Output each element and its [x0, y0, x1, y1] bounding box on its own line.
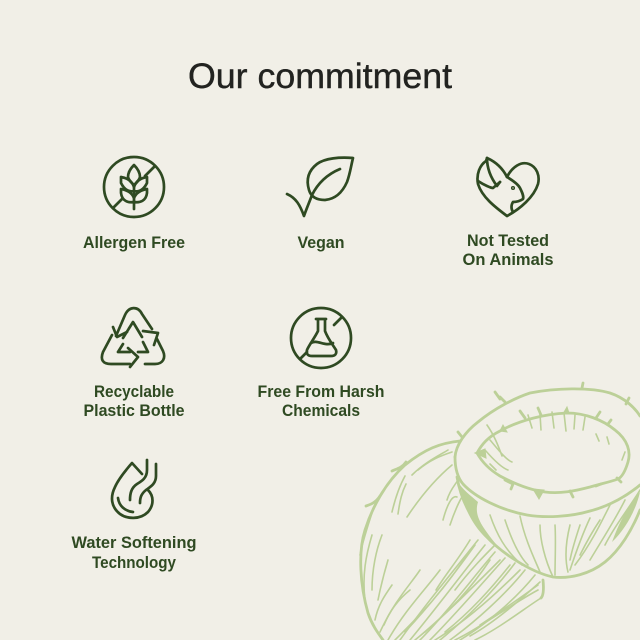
item: not tested on animals: [462, 158, 554, 269]
item: vegan: [287, 158, 353, 252]
illustration: coconut: [360, 383, 640, 640]
icon: crossed flask: [291, 308, 351, 368]
item: water softening technology: [72, 460, 196, 572]
label: Free From Harsh: [258, 383, 384, 401]
label: Not Tested: [467, 232, 549, 250]
shell shading left and right: [458, 482, 500, 549]
front coconut shell: [455, 383, 640, 577]
icon: leaf check: [287, 158, 353, 216]
item: free from harsh chemicals: [258, 308, 384, 420]
item: recyclable plastic bottle: Plastic Bottle: [84, 402, 184, 420]
icon: water drop: [112, 460, 156, 518]
icon: crossed wheat: [104, 157, 164, 217]
item: not tested on animals: On Animals: [462, 251, 554, 269]
icon: rabbit heart: [477, 158, 539, 216]
item: recyclable plastic bottle: [84, 308, 184, 420]
title: Our commitment: [188, 57, 452, 96]
label: Vegan: [298, 234, 344, 252]
item: water softening technology: Technology: [92, 554, 177, 572]
label: Water Softening: [72, 534, 196, 552]
label: Allergen Free: [83, 234, 185, 252]
item: allergen free: [83, 157, 185, 252]
item: free from harsh chemicals: Chemicals: [282, 402, 360, 420]
icon: recycling arrows: [102, 308, 164, 367]
label: Recyclable: [94, 383, 174, 401]
back coconut half: [360, 441, 543, 640]
